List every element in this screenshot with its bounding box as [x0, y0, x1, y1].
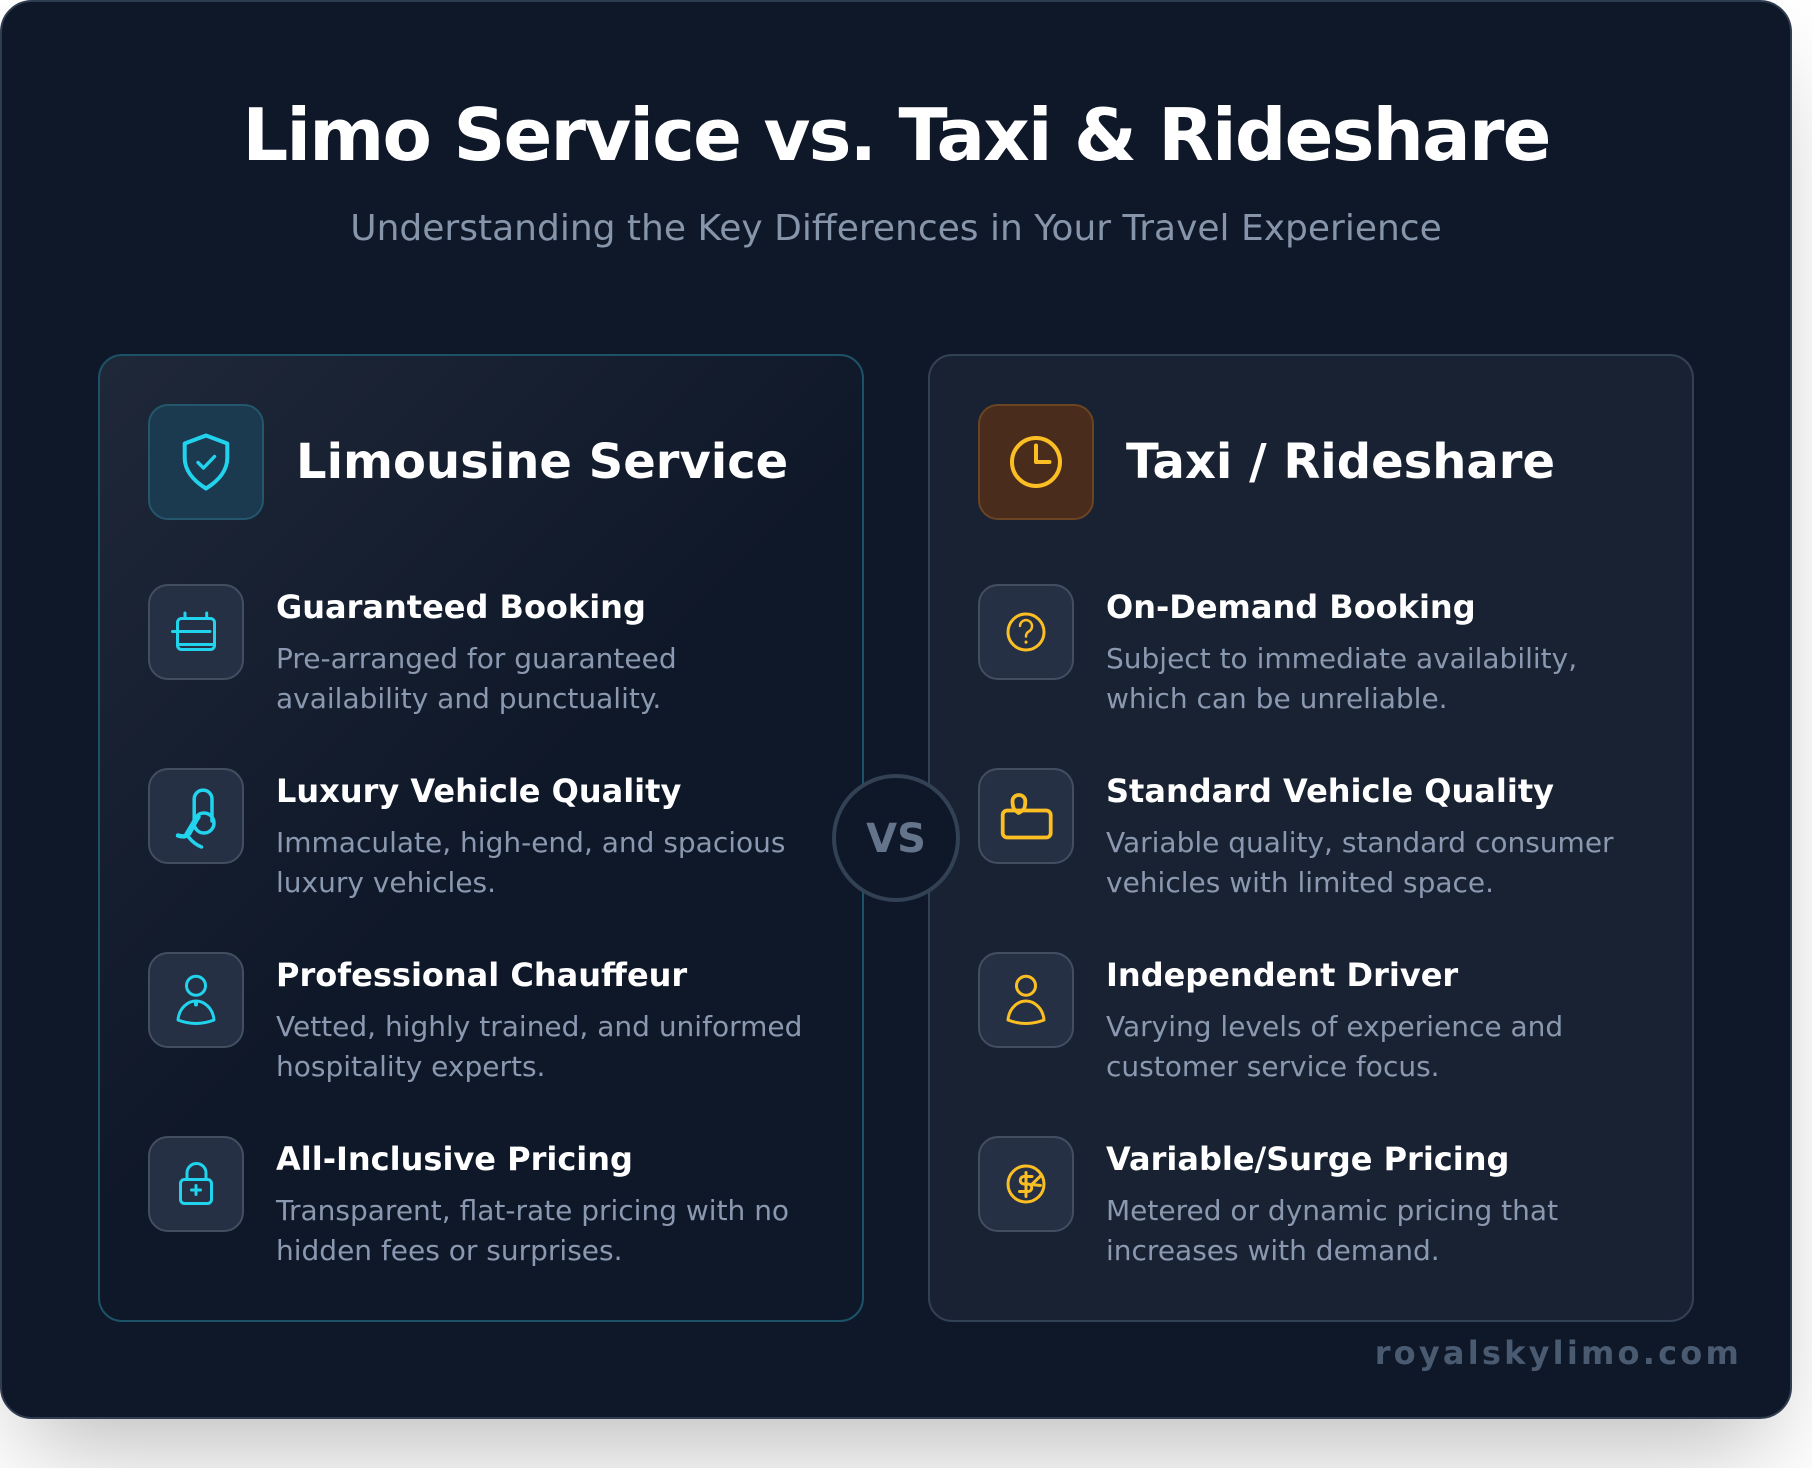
description: variable/surge pricing: increases with demand. [1106, 1234, 1440, 1267]
description: variable/surge pricing [1106, 1194, 1558, 1267]
item: independent driver: Independent Driver [1106, 956, 1458, 994]
item: all-inclusive pricing: All-Inclusive Pricing [276, 1140, 633, 1178]
icon: driver [978, 952, 1074, 1048]
icon: calendar [148, 584, 244, 680]
description: luxury vehicle quality [276, 826, 785, 899]
description: on-demand booking: Subject to immediate availability, [1106, 642, 1577, 675]
panel: limousine service [98, 354, 864, 1322]
description: all-inclusive pricing: hidden fees or surprises. [276, 1234, 622, 1267]
description: independent driver: customer service focus. [1106, 1050, 1440, 1083]
description: independent driver [1106, 1010, 1563, 1083]
description: on-demand booking: which can be unreliable. [1106, 682, 1448, 715]
description: all-inclusive pricing: Transparent, flat-rate pricing with no [276, 1194, 789, 1227]
title: Limo Service vs. Taxi & Rideshare [242, 93, 1550, 177]
description: luxury vehicle quality: Immaculate, high-end, and spacious [276, 826, 785, 859]
description: standard vehicle quality: vehicles with limited space. [1106, 866, 1494, 899]
description: on-demand booking [1106, 642, 1577, 715]
icon: question [978, 584, 1074, 680]
item: professional chauffeur: Professional Chauffeur [276, 956, 687, 994]
heading: taxi / rideshare: Taxi / Rideshare [1126, 434, 1555, 490]
description: all-inclusive pricing [276, 1194, 789, 1267]
footer url: royalskylimo.com [1375, 1334, 1742, 1372]
description: variable/surge pricing: Metered or dynamic pricing that [1106, 1194, 1558, 1227]
subtitle: Understanding the Key Differences in Your Travel Experience [350, 208, 1442, 249]
icon: chauffeur [148, 952, 244, 1048]
item: luxury vehicle quality: Luxury Vehicle Quality [276, 772, 681, 810]
icon: dollar [978, 1136, 1074, 1232]
description: guaranteed booking [276, 642, 677, 715]
description: independent driver: Varying levels of experience and [1106, 1010, 1563, 1043]
panel: taxi / rideshare [928, 354, 1694, 1322]
icon: luxury vehicle [148, 768, 244, 864]
description: guaranteed booking: availability and punctuality. [276, 682, 661, 715]
vs badge [832, 774, 960, 902]
icon: lock [148, 1136, 244, 1232]
description: professional chauffeur [276, 1010, 802, 1083]
description: standard vehicle quality [1106, 826, 1614, 899]
icon: clock [978, 404, 1094, 520]
description: luxury vehicle quality: luxury vehicles. [276, 866, 496, 899]
description: professional chauffeur: Vetted, highly trained, and uniformed [276, 1010, 802, 1043]
item: variable/surge pricing: Variable/Surge Pricing [1106, 1140, 1509, 1178]
icon: shield check [148, 404, 264, 520]
icon: standard vehicle [978, 768, 1074, 864]
item: standard vehicle quality: Standard Vehicle Quality [1106, 772, 1554, 810]
description: guaranteed booking: Pre-arranged for guaranteed [276, 642, 677, 675]
item: guaranteed booking: Guaranteed Booking [276, 588, 646, 626]
item: on-demand booking: On-Demand Booking [1106, 588, 1476, 626]
description: professional chauffeur: hospitality experts. [276, 1050, 545, 1083]
description: standard vehicle quality: Variable quality, standard consumer [1106, 826, 1614, 859]
heading: limousine service: Limousine Service [296, 434, 788, 490]
vs badge: VS [866, 816, 926, 862]
